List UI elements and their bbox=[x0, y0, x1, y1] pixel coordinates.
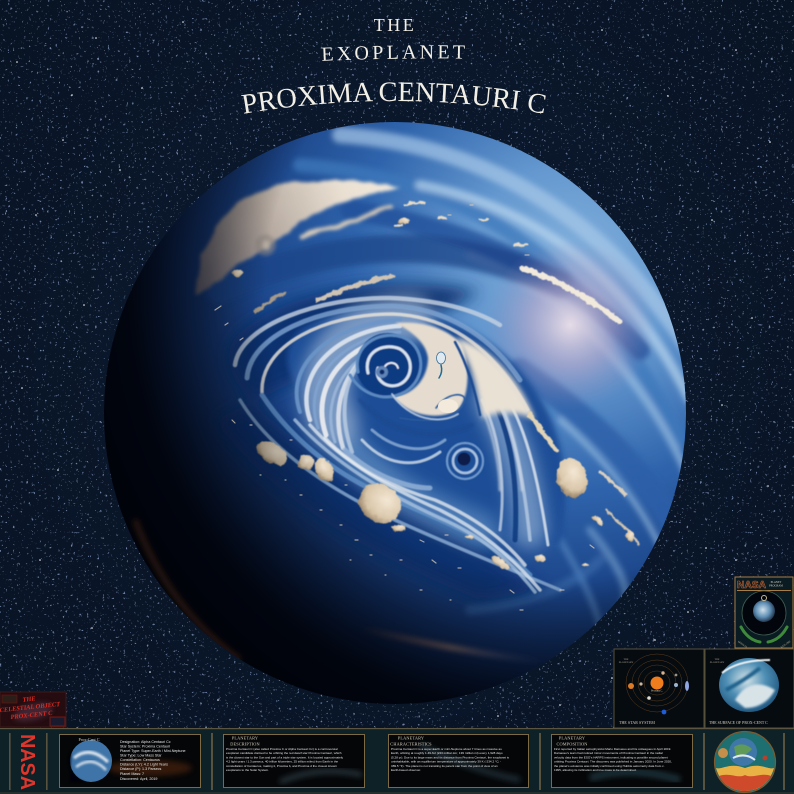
orbit diagram: Proxima C. bbox=[651, 690, 663, 692]
panel: the surface of Prox-Cent C: PLANETARY bbox=[710, 661, 724, 664]
body text: 1995, allowing its inclination and true mass to be determined. bbox=[554, 768, 637, 772]
planet facts: Distance (P): 1.3 Parsecs bbox=[120, 767, 161, 771]
badge: NASA wordmark: NASA bbox=[737, 579, 766, 591]
planet: night shadow bbox=[104, 139, 635, 704]
body text: 4.2 light years / 1.3 parsecs, 40 trillion kilometers, 25 trillion miles) from Earth in the bbox=[226, 760, 338, 764]
planet: polar cloud cap bbox=[196, 180, 400, 295]
planet: swirl storm bbox=[215, 284, 566, 600]
planet facts: Constellation: Centaurus bbox=[120, 758, 160, 762]
planet: cloud bands bbox=[255, 202, 640, 545]
planet facts: Star System: Proxima Centauri bbox=[120, 744, 170, 748]
planet thumbnail bbox=[68, 740, 112, 782]
storm: cream wedge bbox=[455, 338, 535, 420]
panel: orange nebula bbox=[108, 760, 192, 776]
badge: NASA planet program bbox=[735, 577, 793, 649]
planet: Proxima Centauri C bbox=[100, 118, 692, 708]
planet: upper bands bbox=[274, 124, 686, 624]
planet: horizon glow bbox=[135, 520, 545, 662]
badge: program label: PROGRAM bbox=[769, 585, 783, 588]
badge: program label: PLANET bbox=[771, 581, 781, 584]
title: The Exoplanet Proxima Centauri C: PROXIMA CENTAURI C bbox=[241, 82, 546, 114]
panel label: THE SURFACE OF PROX-CENT C bbox=[709, 721, 768, 725]
body text: Earth, orbiting at roughly 1.49 AU (223 million km; 139 million mi) every 1,928 days bbox=[391, 751, 503, 755]
title: The Exoplanet Proxima Centauri C: THE bbox=[374, 15, 416, 35]
body text: Proxima Centauri C is a super-Earth or mini-Neptune about 7 times as massive as bbox=[391, 747, 502, 751]
planet facts: Planet Type: Super-Earth / Mini-Neptune bbox=[120, 749, 186, 753]
badge: laurel bbox=[741, 627, 787, 642]
body text: uninhabitable, with an equilibrium temperature of approximately 39 K (-234.2 °C; - bbox=[391, 760, 501, 764]
storm: main eye bbox=[350, 333, 421, 397]
panel: the celestial object bbox=[0, 692, 66, 727]
planet facts: Designation: Alpha Centauri Cc bbox=[120, 740, 171, 744]
body text: orbiting Proxima Centauri. The discovery was published in January 2020. In June 2020, bbox=[554, 760, 672, 764]
storm: cream core bbox=[392, 322, 468, 416]
panel: the surface of Prox-Cent C: THE bbox=[715, 658, 719, 661]
title: The Exoplanet Proxima Centauri C bbox=[241, 15, 546, 114]
panel: planetary characteristics bbox=[388, 734, 528, 788]
heading: PLANETARY bbox=[559, 736, 585, 740]
body text: the planet's existence was initially confirmed using Hubble astrometry data from c. bbox=[554, 764, 665, 768]
heading: DESCRIPTION bbox=[230, 742, 260, 746]
body text: is the closest star to the Sun and part of a triple star system. It is located approximately bbox=[226, 755, 343, 759]
panel title: THE bbox=[22, 695, 36, 704]
planet: cumulus clouds bbox=[233, 218, 634, 571]
storm: second eye bbox=[445, 441, 485, 481]
heading: PLANETARY bbox=[398, 736, 424, 740]
panel: planet data bbox=[60, 734, 200, 788]
planet facts: Planet Mass: 7 bbox=[120, 772, 144, 776]
panel: planetary composition bbox=[552, 734, 692, 788]
panel: the star system: PLANETARY bbox=[619, 661, 633, 664]
heading: PLANETARY bbox=[232, 736, 258, 740]
panel: planetary description bbox=[224, 734, 364, 788]
body text: Damasso's team had noticed minor movements of Proxima Centauri in the radial bbox=[554, 751, 663, 755]
badge: planet in circle bbox=[742, 591, 786, 635]
body text: 389.5 °F). The planet is not transiting its parent star from the point of view of an bbox=[391, 764, 498, 768]
heading: COMPOSITION bbox=[556, 742, 588, 746]
body text: velocity data from the ESO's HARPS instrument, indicating a possible second planet bbox=[554, 755, 668, 759]
footer band bbox=[0, 728, 794, 794]
body text: Proxima Centauri C (also called Proxima C or Alpha Centauri Cc) is a controversial bbox=[226, 747, 338, 751]
emblem: illustrated globe medallion bbox=[714, 732, 776, 792]
body text: Earth-based observer. bbox=[391, 768, 421, 772]
badge: footer labels: MISSION bbox=[737, 640, 748, 649]
body text: constellation of Centaurus, making it, Proxima b, and Proxima d the closest known bbox=[226, 764, 337, 768]
storm: inner white cloud bbox=[438, 399, 458, 413]
body text: (5.28 yr). Due to its large mass and its distance from Proxima Centauri, the exoplanet is bbox=[391, 755, 510, 759]
panel title: CELESTIAL OBJECT bbox=[0, 701, 62, 714]
surface globe bbox=[719, 658, 779, 712]
title: The Exoplanet Proxima Centauri C: EXOPLANET bbox=[322, 45, 465, 61]
storm: flowing streaks bbox=[235, 298, 560, 592]
heading: CHARACTERISTICS bbox=[390, 742, 432, 746]
planet facts: Star Type: Low Mass Star bbox=[120, 754, 162, 758]
panel: the surface of Prox-Cent C bbox=[705, 649, 794, 728]
planet: scattered islands bbox=[215, 205, 594, 610]
storm: pale streak band underlay bbox=[325, 318, 530, 530]
panel: the star system bbox=[614, 649, 704, 728]
body text: First reported by Italian astrophysicist Mario Damasso and his colleagues in April 2019. bbox=[554, 747, 671, 751]
NASA worm logo: NASA bbox=[16, 734, 38, 790]
thumbnail caption: Prox-Cent C bbox=[78, 737, 100, 742]
planet: pale highlight bbox=[498, 250, 646, 404]
badge: NASA planet program: EXPLORE bbox=[780, 640, 792, 649]
planet facts: Distance (LY): 4.2 Light Years bbox=[120, 762, 168, 766]
body text: exoplanet candidate claimed to be orbiting the red dwarf star Proxima Centauri, which bbox=[226, 751, 342, 755]
panel label: THE STAR SYSTEM bbox=[619, 721, 655, 725]
planet facts: Discovered: April, 2019 bbox=[120, 777, 157, 781]
panel title: PROX-CENT C bbox=[10, 710, 54, 721]
body text: exoplanets to the Solar System. bbox=[226, 768, 269, 772]
panel: the star system: THE bbox=[624, 658, 628, 661]
storm: small white cell bbox=[436, 352, 446, 364]
